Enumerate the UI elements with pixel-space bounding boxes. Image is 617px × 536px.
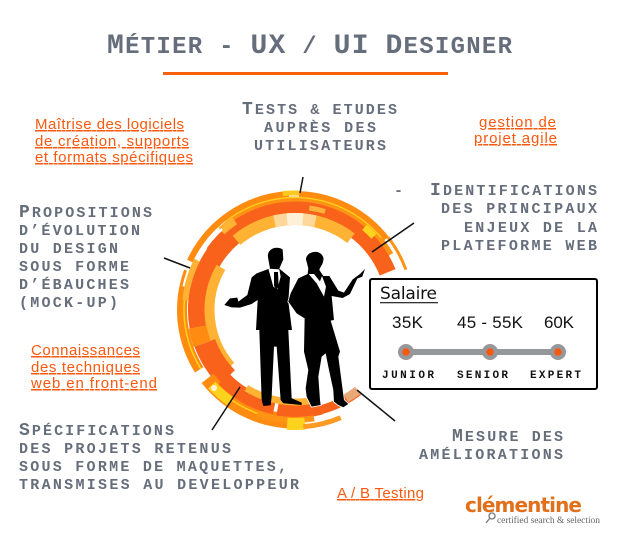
ring graphic [129, 144, 461, 476]
logo: clementine: certified search & selection [497, 515, 600, 526]
task: propositions: D’ÉVOLUTION [19, 222, 140, 240]
skill: ab testing: A / B Testing [337, 485, 424, 502]
skill: logiciels [35, 116, 193, 166]
title: MÉTIER - UX / UI DESIGNER [107, 31, 513, 62]
level labels: JUNIOR [382, 370, 434, 382]
connector: top [300, 177, 303, 193]
task: mesure: AMÉLIORATIONS [419, 446, 563, 464]
skill: connaissances: des techniques [31, 359, 140, 376]
silhouette: tie [274, 272, 279, 289]
task: specifications: DES PROJETS RETENUS [19, 441, 231, 458]
task: specifications: SPÉCIFICATIONS [19, 421, 174, 441]
task: identifications: PLATEFORME WEB [441, 238, 597, 255]
salary values: 35K [392, 313, 424, 332]
salary values: 60K [544, 313, 575, 332]
silhouette: woman [288, 252, 365, 407]
skill: logiciels: de création, supports [35, 133, 189, 150]
task: propositions [19, 203, 152, 312]
task: specifications: TRANSMISES AU DEVELOPPEUR [19, 477, 299, 494]
skill: logiciels: Maîtrise des logiciels [35, 116, 184, 133]
connector: bottom right [357, 390, 395, 421]
level labels: EXPERT [530, 370, 581, 382]
connector: left [164, 258, 190, 268]
silhouette: man [224, 248, 302, 406]
title underline [163, 72, 448, 75]
level labels: SENIOR [457, 370, 508, 382]
skill: gestion de projet: projet agile [474, 130, 557, 147]
connector: bottom left [212, 387, 240, 430]
salary values [392, 313, 575, 332]
salary values: 45 - 55K [457, 313, 524, 332]
task: identifications [394, 181, 597, 255]
logo: clementine: clémentine [465, 493, 582, 517]
salary scale [398, 344, 566, 360]
task: identifications: - [394, 183, 403, 200]
skill: connaissances: web en front-end [30, 375, 157, 392]
task: tests: AUPRÈS DES [264, 119, 376, 137]
silhouette: shirt [268, 269, 281, 289]
logo: clementine [465, 493, 600, 526]
task: propositions: DU DESIGN [19, 241, 118, 258]
task: propositions: D’ÉBAUCHES [19, 276, 129, 294]
skill: logiciels: et formats spécifiques [35, 149, 193, 166]
salaire heading: Salaire [380, 284, 437, 304]
task: identifications: ENJEUX DE LA [464, 220, 597, 237]
skill: connaissances [30, 342, 157, 392]
skill: connaissances: Connaissances [31, 342, 140, 359]
task: identifications: IDENTIFICATIONS [430, 181, 597, 201]
icon: magnifier [486, 513, 495, 523]
task: propositions: (MOCK-UP) [19, 295, 118, 312]
level labels [382, 370, 581, 382]
connector: right [372, 223, 414, 252]
skill: gestion de projet [474, 114, 557, 147]
task: mesure [419, 427, 563, 464]
task: mesure: MESURE DES [452, 427, 563, 447]
task: tests: TESTS & ETUDES [242, 100, 397, 120]
skill: gestion de projet: gestion de [479, 114, 556, 131]
task: identifications: DES PRINCIPAUX [441, 201, 597, 218]
task: propositions: SOUS FORME [19, 259, 129, 276]
task: specifications [19, 421, 299, 494]
task: propositions: PROPOSITIONS [19, 203, 152, 223]
silhouette: collar [309, 274, 326, 297]
panel: salaire [370, 279, 597, 389]
task: tests [242, 100, 397, 155]
task: specifications: SOUS FORME DE MAQUETTES, [19, 459, 287, 476]
task: tests: UTILISATEURS [254, 138, 386, 155]
